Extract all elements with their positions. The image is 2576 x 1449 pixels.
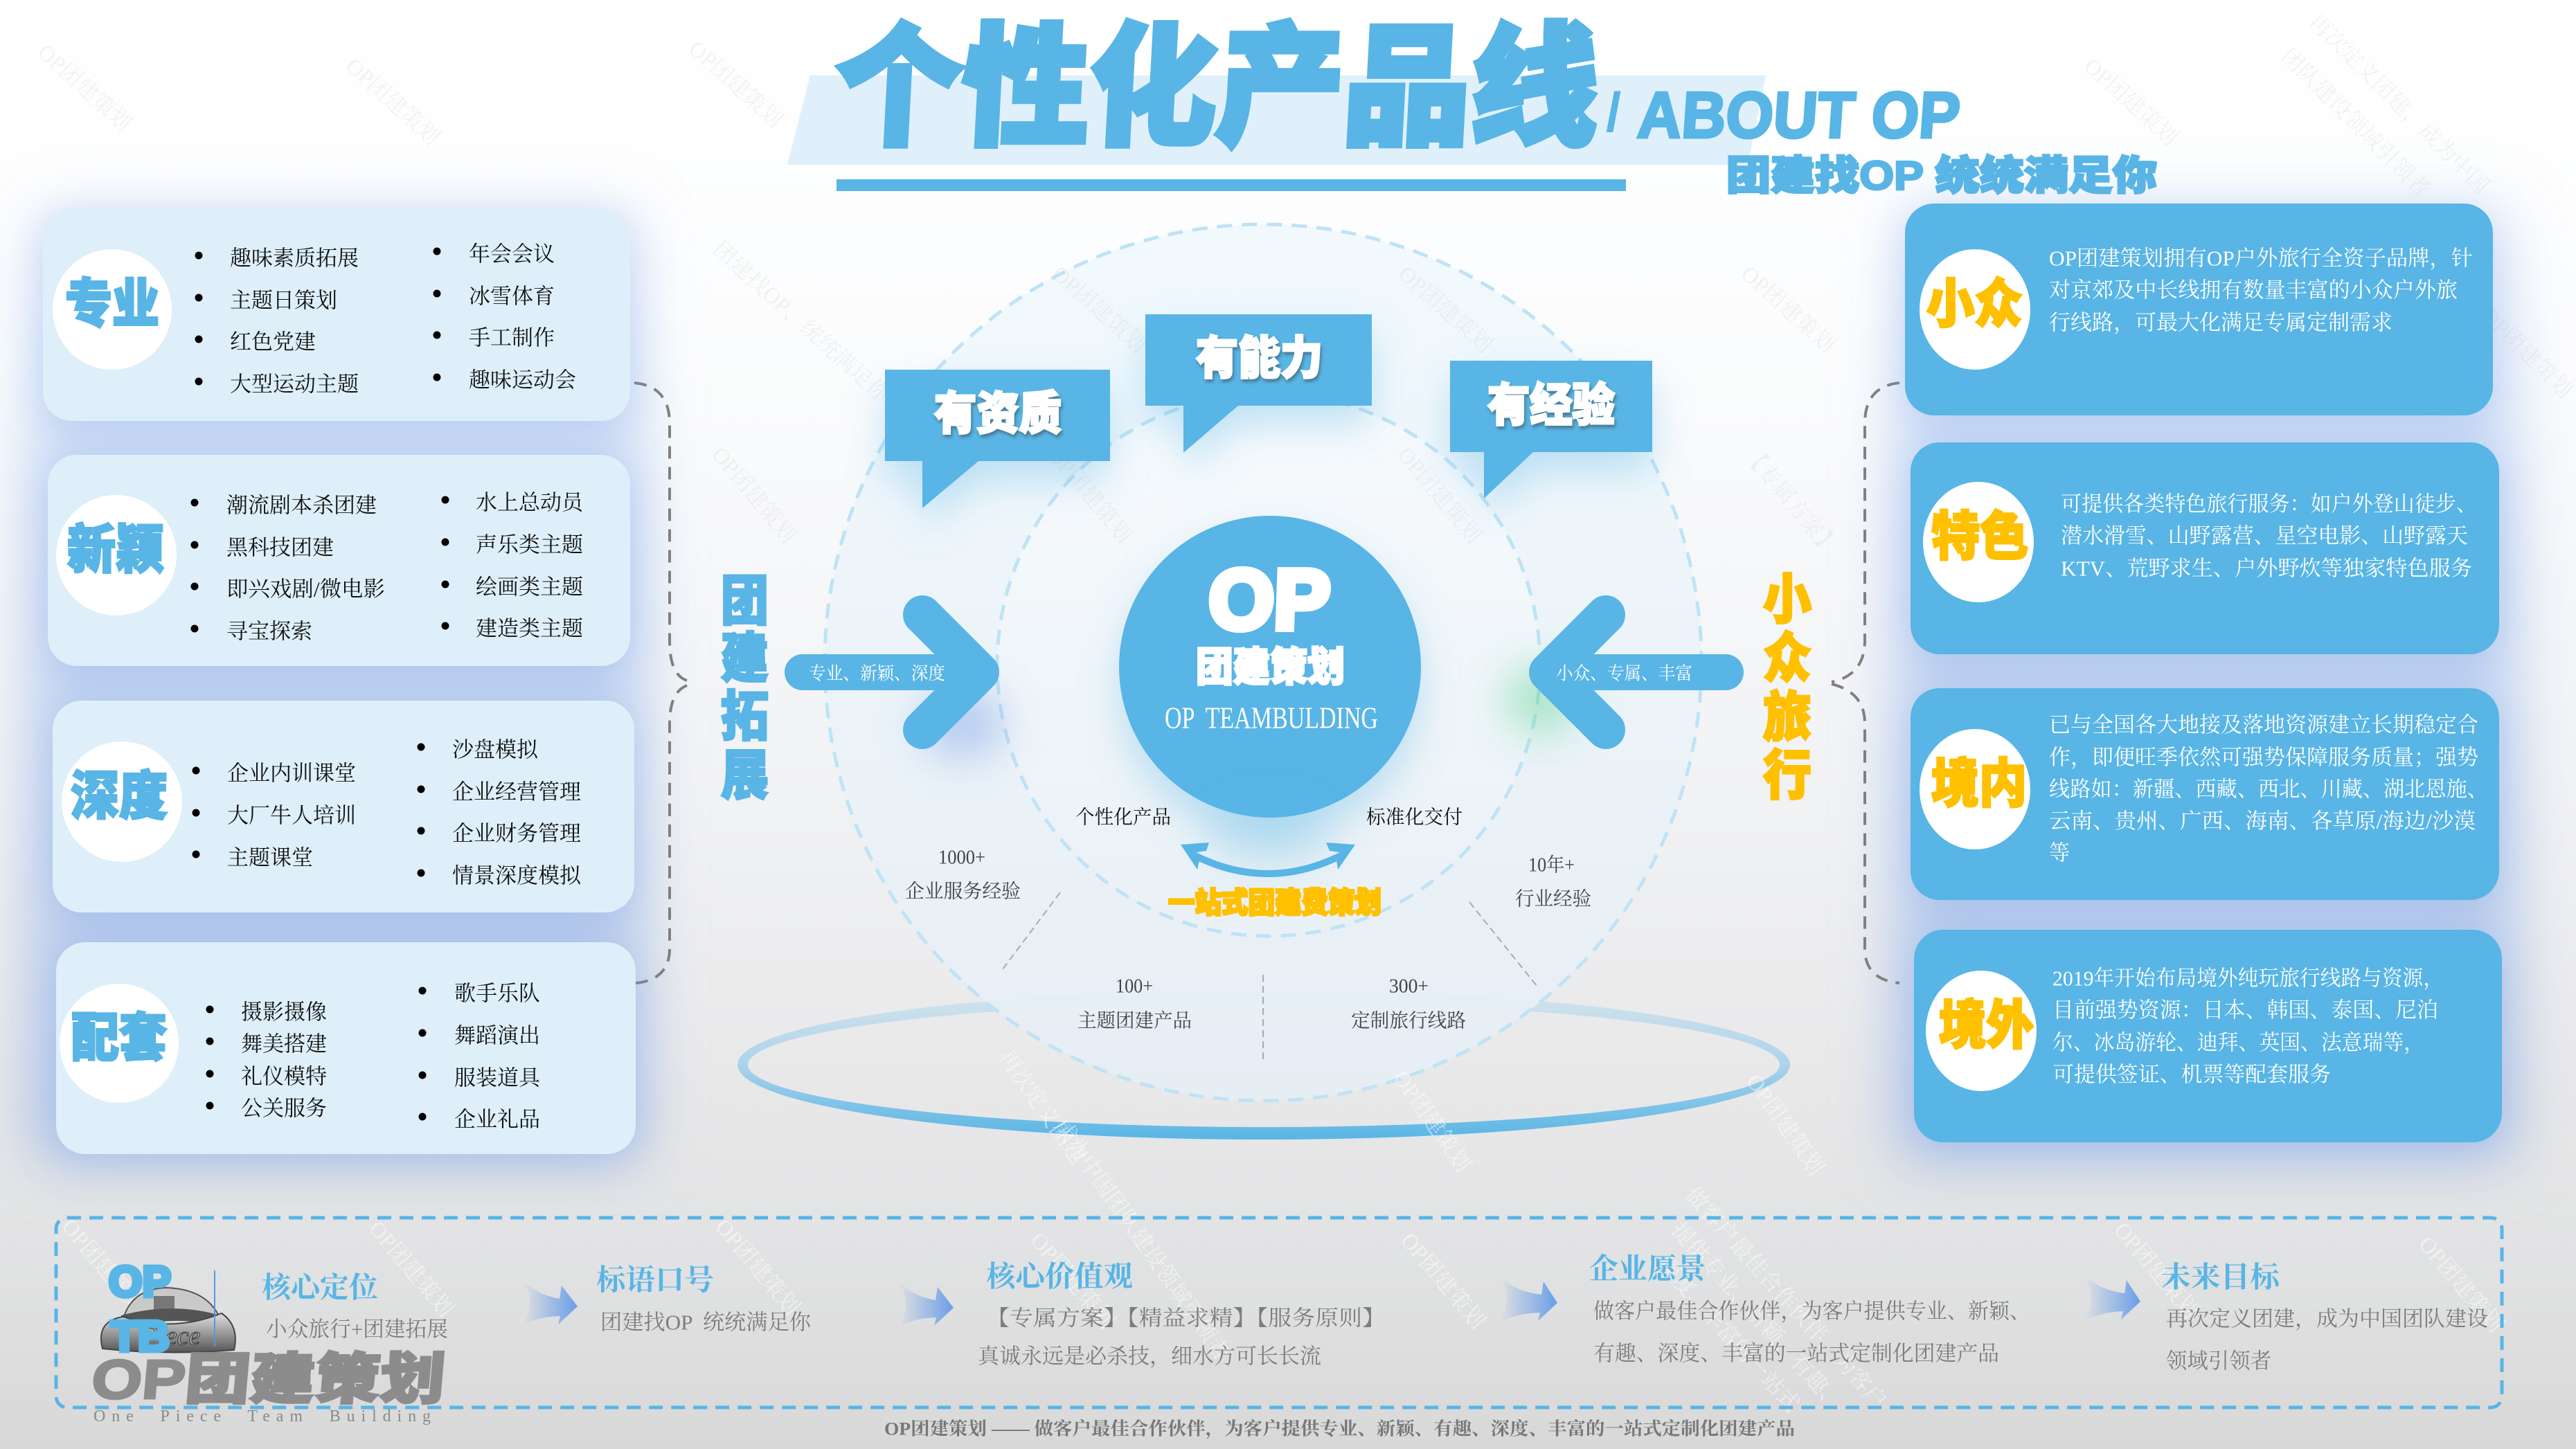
badge: 特色: 特色	[1931, 508, 2028, 566]
title band	[787, 75, 1766, 165]
list: 专业 right: 冰雪体育	[469, 284, 555, 309]
item: 核心价值观	[978, 1261, 1386, 1368]
watermarks: 深度、丰富的一站式	[1653, 1252, 1805, 1416]
vertical heading: 团建拓展	[721, 570, 769, 806]
left arrow: 专业、新颖、深度	[809, 663, 945, 684]
list: 深度 right	[417, 738, 582, 888]
list: 配套 right: 歌手乐队	[454, 982, 540, 1005]
stat: 300+	[1351, 976, 1466, 1032]
list: 配套 right: 舞蹈演出	[454, 1023, 540, 1048]
title english: /	[1606, 82, 1621, 143]
callout: 有经验: 有经验	[1487, 379, 1615, 431]
list: 专业 right: 年会会议	[469, 242, 555, 266]
list: 深度 right: 企业财务管理	[452, 821, 581, 846]
main title: 个性化产品线	[832, 15, 1602, 162]
arrow: step 4	[2084, 1276, 2140, 1321]
watermarks: OP团建策划	[57, 1214, 151, 1320]
description: 小众: 对京郊及中长线拥有数量丰富的小众户外旅	[2049, 278, 2458, 302]
watermarks: 提供专业、新颖、有趣、	[1667, 1217, 1848, 1415]
logo: OP TB mark	[109, 1259, 215, 1361]
glow under centre	[1206, 800, 1331, 869]
panel: 境内	[1911, 688, 2499, 900]
list: 配套 right: 企业礼品	[454, 1108, 540, 1131]
watermarks: OP团建策划	[1742, 1070, 1830, 1180]
badge: 新颖: 新颖	[67, 521, 164, 580]
left arrow	[785, 615, 1004, 758]
description: 小众	[2049, 246, 2473, 335]
list: 专业 right: 手工制作	[469, 325, 555, 350]
badge: 小众	[1920, 249, 2030, 370]
panel: 专业	[43, 208, 630, 421]
item: 标语口号: 团建找OP 统统满足你	[600, 1310, 812, 1335]
item: 核心价值观: 核心价值观	[986, 1261, 1133, 1293]
watermarks: 再次定义团建	[994, 1045, 1091, 1169]
outer dashed circle	[825, 224, 1701, 1101]
arrow: step 2	[899, 1282, 954, 1327]
list: 配套 left: 礼仪模特	[241, 1065, 327, 1088]
stat: 100+: 100+	[1116, 976, 1153, 997]
badge: 专业: 专业	[65, 276, 159, 334]
list: 深度 left: 企业内训课堂	[227, 762, 356, 785]
watermarks: OP团建策划	[1048, 261, 1152, 357]
ring platform	[737, 990, 1790, 1140]
arrow: step 1	[523, 1281, 578, 1326]
panel: 小众	[1905, 204, 2493, 415]
stat: 10年+: 10年+	[1528, 854, 1575, 876]
stat: 1000+: 企业服务经验	[905, 881, 1021, 903]
watermarks: OP团建策划	[2109, 1217, 2203, 1323]
description: 境内: 线路如：新疆、西藏、西北、川藏、湖北恩施、	[2049, 777, 2488, 802]
badge: 专业	[53, 249, 172, 370]
badge: 配套	[60, 984, 179, 1103]
watermarks: OP团建策划	[1393, 442, 1487, 548]
label: 团建策划: 团建策划	[1196, 645, 1345, 690]
inner dashed circle	[997, 393, 1540, 936]
callout: 有能力	[1145, 314, 1372, 453]
right connector brace	[1832, 383, 1899, 983]
description: 境外: 2019年开始布局境外纯玩旅行线路与资源，	[2052, 966, 2444, 990]
left card halo	[28, 208, 644, 1163]
right card halo	[1894, 201, 2517, 1163]
list: 新颖 right: 水上总动员	[476, 490, 584, 515]
arrow: step 3	[1500, 1277, 1557, 1322]
vertical heading: 小众旅行: 行	[1763, 745, 1812, 806]
item: 核心定位	[262, 1272, 448, 1342]
title english: ABOUT OP	[1636, 79, 1962, 151]
list: 深度 left: 大厂牛人培训	[227, 803, 356, 828]
description: 特色: 潜水滑雪、山野露营、星空电影、山野露天	[2061, 523, 2468, 548]
list: 专业 right: 趣味运动会	[469, 368, 576, 392]
description: 境内	[2049, 713, 2488, 865]
badge: 配套: 配套	[71, 1009, 167, 1068]
item: 核心定位: 小众旅行+团建拓展	[266, 1317, 448, 1342]
list: 配套 left: 摄影摄像	[241, 1000, 327, 1025]
badge: 小众: 小众	[1926, 276, 2023, 334]
item: 企业愿景: 企业愿景	[1589, 1253, 1706, 1286]
watermarks: OP团建策划	[710, 1214, 805, 1320]
stat: 100+	[1077, 976, 1192, 1032]
description: 境内: 等	[2049, 840, 2070, 865]
panel: 深度	[53, 701, 634, 912]
watermarks: 团建找OP、统统满足你	[708, 237, 895, 408]
watermarks: OP团建策划	[707, 442, 801, 548]
list: 配套 right: 服装道具	[454, 1066, 542, 1090]
item: 未来目标: 领域引领者	[2166, 1349, 2271, 1374]
list: 新颖 left	[191, 493, 385, 644]
logo: OP团建策划: OP团建策划	[89, 1348, 448, 1410]
watermarks: OP团建策划	[2079, 53, 2183, 150]
description: 小众: OP团建策划拥有OP户外旅行全资子品牌，针	[2049, 246, 2473, 270]
vertical heading: 小众旅行	[1763, 569, 1812, 806]
list: 专业 left: 红色党建	[230, 330, 316, 354]
vertical heading: 小众旅行: 小	[1763, 569, 1812, 630]
list: 新颖 left: 即兴戏剧/微电影	[226, 577, 385, 601]
item: 标语口号: 标语口号	[596, 1264, 714, 1297]
stat: 100+: 主题团建产品	[1077, 1009, 1192, 1032]
watermarks: OP团建策划	[1394, 261, 1498, 357]
list: 专业 left: 大型运动主题	[230, 372, 359, 396]
badge: 深度	[62, 741, 182, 862]
watermarks: OP团建策划	[1396, 1227, 1490, 1333]
watermarks: 再次定义团建，成为中国	[2304, 8, 2494, 199]
list: 深度 left: 主题课堂	[227, 846, 313, 870]
logo: OP TB mark: TB	[111, 1313, 170, 1361]
left connector brace	[634, 383, 687, 983]
stat: 1000+: 1000+	[938, 847, 985, 868]
item: 核心定位: 核心定位	[262, 1272, 378, 1304]
description: 特色: KTV、荒野求生、户外野炊等独家特色服务	[2061, 557, 2472, 580]
badge: 新颖	[56, 495, 177, 615]
stat: 1000+	[905, 847, 1021, 903]
panel: 境外	[1914, 930, 2502, 1142]
stat: 10年+	[1515, 854, 1591, 910]
watermarks: OP团建策划	[1737, 261, 1841, 357]
callout: 有能力: 有能力	[1196, 332, 1323, 384]
list: 专业 right	[433, 242, 576, 392]
panel: 配套	[56, 942, 636, 1154]
item: 未来目标: 再次定义团建，成为中国团队建设	[2166, 1307, 2488, 1331]
item: 核心价值观: 真诚永远是必杀技，细水方可长长流	[978, 1344, 1321, 1368]
watermarks: 成为中国团队建设领域引领者	[1049, 1115, 1235, 1365]
right arrow: 小众、专属、丰富	[1556, 663, 1692, 684]
list: 新颖 right	[442, 490, 584, 641]
label: 标准化交付: 标准化交付	[1366, 806, 1463, 828]
watermarks: 做客户最佳合作伙伴，为客户	[1681, 1182, 1892, 1413]
list: 深度 right: 沙盘模拟	[452, 738, 539, 762]
icon: double arrow	[1181, 843, 1355, 874]
badge: 特色	[1923, 482, 2034, 602]
title underline	[837, 179, 1626, 191]
stat: 300+: 300+	[1389, 976, 1429, 997]
list: 新颖 right: 绘画类主题	[476, 575, 583, 600]
list: 深度 right: 企业经营管理	[452, 780, 581, 804]
watermarks: OP团建策划	[684, 36, 788, 132]
vertical heading: 团建拓展: 团	[721, 570, 769, 631]
callout: 有经验	[1450, 361, 1652, 498]
watermarks: OP团建策划	[2414, 1231, 2508, 1337]
list: 深度 left	[193, 762, 356, 870]
logo text: OP: OP	[1207, 552, 1332, 647]
watermarks: 团队建设领域引领者	[2276, 43, 2435, 201]
item: 企业愿景: 有趣、深度、丰富的一站式定制化团建产品	[1593, 1342, 1999, 1365]
watermarks: OP团建策划	[1026, 1227, 1120, 1333]
description: 境内: 已与全国各大地接及落地资源建立长期稳定合	[2049, 713, 2478, 737]
badge: 境外: 境外	[1939, 997, 2034, 1055]
description: 境外: 可提供签证、机票等配套服务	[2052, 1062, 2331, 1087]
bottom dashed panel	[56, 1218, 2502, 1407]
list: 深度 right: 情景深度模拟	[452, 864, 582, 888]
list: 新颖 left: 潮流剧本杀团建	[226, 493, 377, 518]
badge: 境内: 境内	[1931, 755, 2027, 814]
list: 专业 left: 趣味素质拓展	[230, 246, 359, 270]
footer note: OP团建策划 —— 做客户最佳合作伙伴，为客户提供专业、新颖、有趣、深度、丰富的一站式定制化团建产品	[884, 1418, 1795, 1440]
panel: 特色	[1911, 442, 2499, 654]
description: 境外: 尔、冰岛游轮、迪拜、英国、法意瑞等，	[2052, 1030, 2424, 1055]
central circle	[1119, 516, 1421, 818]
vertical heading: 团建拓展: 建	[721, 628, 769, 689]
list: 新颖 right: 建造类主题	[476, 616, 583, 641]
description: 特色: 可提供各类特色旅行服务：如户外登山徒步、	[2061, 492, 2477, 516]
panel: 新颖	[48, 455, 630, 666]
logo: tank icon: Piece	[141, 1322, 201, 1351]
list: 配套 right	[418, 982, 542, 1131]
stat dividers	[1001, 892, 1537, 1061]
subtitle: 团建找OP 统统满足你	[1726, 154, 2157, 198]
callout: 有资质: 有资质	[934, 388, 1062, 439]
vertical heading: 小众旅行: 旅	[1763, 687, 1812, 748]
logo: english tagline: One Piece Team Building	[93, 1407, 431, 1425]
badge: 境内	[1920, 729, 2030, 849]
callout: 有资质	[885, 370, 1110, 508]
watermarks: OP团建策划	[1043, 442, 1137, 548]
watermarks: OP团建策划	[341, 53, 445, 150]
list: 配套 left: 公关服务	[241, 1097, 327, 1120]
list: 新颖 right: 声乐类主题	[476, 533, 583, 557]
watermarks: OP团建策划	[33, 39, 137, 136]
list: 专业 left: 主题日策划	[230, 288, 337, 313]
item: 核心价值观: 【专属方案】【精益求精】【服务原则】	[986, 1306, 1386, 1331]
description: 境内: 作，即便旺季依然可强势保障服务质量；强势	[2049, 745, 2478, 770]
item: 企业愿景	[1589, 1253, 2030, 1365]
item: 标语口号	[596, 1264, 812, 1335]
description: 境外: 目前强势资源：日本、韩国、泰国、尼泊	[2052, 998, 2438, 1022]
badge: 境外	[1926, 971, 2037, 1091]
description: 特色	[2061, 492, 2477, 580]
label: english name: OP TEAMBULDING	[1165, 701, 1378, 735]
watermarks: OP团建策划	[2477, 303, 2576, 403]
right arrow	[1506, 615, 1744, 734]
item: 未来目标	[2161, 1261, 2488, 1374]
item: 未来目标: 未来目标	[2161, 1261, 2282, 1294]
slogan: 一站式团建费策划: 一站式团建费策划	[1168, 886, 1381, 919]
stat: 300+: 定制旅行线路	[1351, 1009, 1466, 1032]
vertical heading: 团建拓展: 展	[721, 745, 769, 806]
logo: OP TB mark: OP	[109, 1259, 171, 1306]
watermarks: 【专属方案】	[1739, 442, 1843, 560]
watermarks: OP团建策划	[364, 1216, 458, 1322]
list: 专业 left	[195, 246, 359, 396]
list: 配套 left: 舞美搭建	[241, 1032, 327, 1056]
vertical heading: 小众旅行: 众	[1763, 628, 1812, 689]
vertical heading: 团建拓展: 拓	[721, 686, 769, 747]
stat: 10年+: 行业经验	[1515, 888, 1591, 910]
badge: 深度: 深度	[71, 767, 168, 827]
item: 企业愿景: 做客户最佳合作伙伴，为客户提供专业、新颖、	[1593, 1299, 2030, 1324]
list: 新颖 left: 寻宝探索	[226, 619, 312, 644]
list: 配套 left	[206, 1000, 327, 1120]
watermarks: OP团建策划	[1388, 1066, 1476, 1176]
description: 境内: 云南、贵州、广西、海南、各草原/海边/沙漠	[2049, 809, 2476, 834]
description: 境外	[2052, 966, 2444, 1087]
logo: tank icon	[101, 1288, 235, 1353]
list: 新颖 left: 黑科技团建	[226, 536, 334, 559]
label: 个性化产品: 个性化产品	[1075, 806, 1171, 828]
description: 小众: 行线路，可最大化满足专属定制需求	[2049, 310, 2392, 335]
